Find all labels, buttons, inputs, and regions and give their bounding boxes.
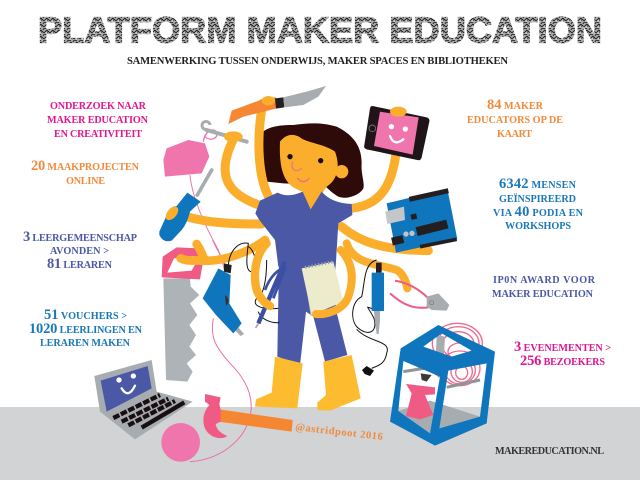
icon: soldering iron with cable [353,260,387,376]
stat: vouchers [29,307,143,349]
face and neck [280,135,348,210]
stat: vouchers: 1020 LEERLINGEN EN [29,321,143,337]
icon: screwdriver [159,170,212,241]
right arms [316,243,407,314]
boots [255,355,361,411]
stat: leergemeenschap: 3 LEERGEMEENSCHAP [23,229,137,245]
stat: maakprojecten: 20 MAAKPROJECTEN [31,158,140,174]
icon: arduino board [385,189,457,253]
stat: mensen geinspireerd [493,176,584,232]
stat: onderzoek: ONDERZOEK NAAR [50,101,147,112]
icon: top pliers [202,121,247,142]
stat: evenementen: 3 EVENEMENTEN > [514,339,611,355]
torso [255,192,352,267]
stat: evenementen: 256 BEZOEKERS [520,353,605,369]
yarn string [190,175,225,280]
icon: pink pliers [390,281,449,311]
icon: hammer [203,394,293,438]
icon: pink bag [163,130,217,177]
pink wire [432,323,482,386]
icon: drill [203,243,256,336]
stat: leergemeenschap: AVONDEN > [50,246,109,257]
floor band [0,407,640,480]
title: PLATFORM MAKER EDUCATION [38,10,602,50]
stat: mensen geinspireerd: GEÏNSPIREERD [499,192,576,205]
icon: tablet [364,106,429,160]
stat: leergemeenschap: 81 LERAREN [47,256,113,272]
stat: maker educators [467,97,563,140]
illustration: maker figure lower [161,240,449,462]
signature: @astridpoot 2016 [295,422,383,443]
stat: leergemeenschap [23,229,137,272]
stat: maker educators: EDUCATORS OP DE [467,115,563,126]
stat: onderzoek [47,101,149,140]
stat: vouchers: LERAREN MAKEN [40,338,131,349]
stat: maakprojecten: ONLINE [66,176,105,187]
icon: saw [162,247,203,382]
stat: maker educators: 84 MAKER [487,97,544,113]
website: MAKEREDUCATION.NL [495,446,604,457]
legs [277,240,347,365]
stat: mensen geinspireerd: 6342 MENSEN [499,176,577,192]
printer frame [390,325,495,446]
stat: award: MAKER EDUCATION [492,289,594,300]
stat: onderzoek: MAKER EDUCATION [47,115,149,126]
icon: notepad [302,262,343,316]
stat: mensen geinspireerd: WORKSHOPS [505,221,571,232]
icon: laptop [94,360,193,439]
cable behind pen [255,260,279,323]
icon: knife [228,86,326,124]
arms behind [185,103,428,251]
icon: 3d printer [390,323,495,446]
lower left arm [181,240,265,261]
stat: onderzoek: EN CREATIVITEIT [54,129,142,140]
stat: maker educators: KAART [497,129,532,140]
stat: award [492,275,596,300]
stat: vouchers: 51 VOUCHERS > [44,307,127,323]
printer parts [435,335,445,377]
stat: maakprojecten [31,158,140,187]
yarn string lower [190,240,251,462]
stat: mensen geinspireerd: VIA 40 PODIA EN [493,204,584,220]
stat: award: IP0N AWARD VOOR [493,275,596,286]
illustration: maker figure upper [159,86,457,280]
icon: yarn ball [161,423,200,462]
icon: pen [256,262,285,328]
hair [257,123,364,198]
subtitle: SAMENWERKING TUSSEN ONDERWIJS, MAKER SPACES EN BIBLIOTHEKEN [127,56,508,67]
stat: evenementen [514,339,611,369]
arm holding pen [255,243,270,306]
